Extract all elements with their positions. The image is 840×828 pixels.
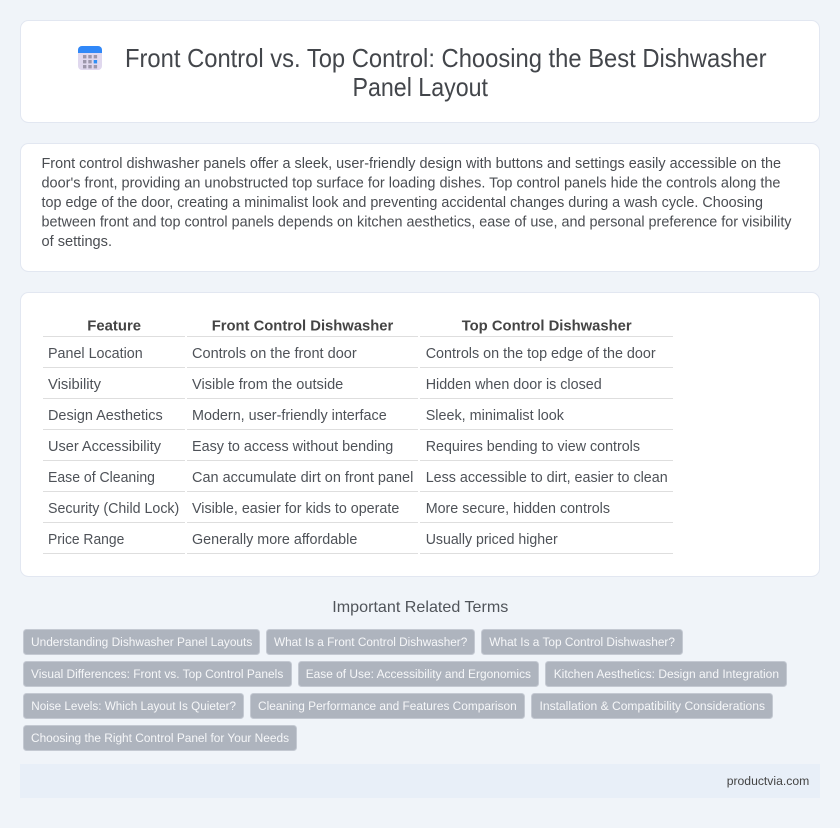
tag: Understanding Dishwasher Panel Layouts — [31, 635, 252, 649]
row: design aesthetics: Sleek, minimalist look — [426, 408, 565, 424]
row: user accessibility: Easy to access without bending — [192, 439, 393, 455]
row: panel location: Controls on the front door — [192, 346, 357, 362]
footer: productvia.com — [727, 774, 809, 788]
row: price range — [43, 532, 673, 554]
table header: Top Control Dishwasher — [462, 318, 632, 334]
row: design aesthetics: Design Aesthetics — [48, 408, 163, 424]
tag — [24, 662, 292, 686]
panel: description — [20, 144, 820, 272]
text block: description: of settings. — [42, 234, 112, 250]
tag: Noise Levels: Which Layout Is Quieter? — [31, 699, 236, 713]
row: ease of cleaning — [43, 470, 673, 492]
title: Panel Layout — [352, 72, 489, 102]
panel: header — [20, 20, 820, 122]
table header: Feature — [87, 318, 141, 334]
row: user accessibility: Requires bending to view controls — [426, 439, 640, 455]
panel: comparison table — [20, 292, 820, 576]
text block: description: top edge of the door, creating a minimalist look and preventing accidental changes during a wash cycle. Choosing — [42, 195, 763, 211]
row: user accessibility: User Accessibility — [48, 439, 162, 455]
table header: Front Control Dishwasher — [212, 318, 394, 334]
row: price range: Price Range — [48, 532, 124, 548]
row: visibility: Visibility — [48, 377, 102, 393]
tag — [532, 694, 772, 718]
row: panel location: Controls on the top edge of the door — [426, 346, 656, 362]
row: visibility: Visible from the outside — [192, 377, 343, 393]
footer — [20, 764, 820, 798]
title — [125, 43, 767, 102]
row: user accessibility — [43, 439, 673, 460]
tag — [250, 694, 524, 718]
text block: description — [42, 156, 792, 250]
icon: dishwasher control panel — [78, 46, 102, 70]
tag: Installation & Compatibility Considerations — [540, 699, 765, 713]
tag: Cleaning Performance and Features Comparison — [258, 699, 517, 713]
text block: description: between front and top control panels depends on kitchen aesthetics, ease of use, and personal preference for visibility — [42, 214, 792, 230]
row: security: Security (Child Lock) — [48, 501, 179, 517]
tag: Ease of Use: Accessibility and Ergonomics — [306, 667, 531, 681]
title: Front Control vs. Top Control: Choosing the Best Dishwasher — [125, 43, 767, 73]
row: price range: Usually priced higher — [426, 532, 558, 548]
tag — [24, 726, 296, 750]
tag: What Is a Top Control Dishwasher? — [489, 635, 675, 649]
tag — [546, 662, 786, 686]
text block: description: door's front, providing an unobstructed top surface for loading dishes. Top control panels hide the controls along the — [42, 176, 780, 192]
row: ease of cleaning: Less accessible to dirt, easier to clean — [426, 470, 668, 486]
row: security: Visible, easier for kids to operate — [192, 501, 399, 517]
table header — [43, 318, 673, 336]
row: ease of cleaning: Ease of Cleaning — [48, 470, 155, 486]
tag: What Is a Front Control Dishwasher? — [274, 635, 468, 649]
row: price range: Generally more affordable — [192, 532, 357, 548]
text block: description: Front control dishwasher panels offer a sleek, user-friendly design with buttons and settings easily accessible on the — [42, 156, 781, 172]
row: panel location — [43, 346, 673, 368]
tag group: related terms — [24, 630, 786, 750]
row: visibility: Hidden when door is closed — [426, 377, 602, 393]
row: security — [43, 501, 673, 522]
tag — [24, 630, 260, 654]
row: panel location: Panel Location — [48, 346, 143, 362]
tag — [266, 630, 474, 654]
tag — [24, 694, 244, 718]
row: security: More secure, hidden controls — [426, 501, 610, 517]
tag: Choosing the Right Control Panel for Your Needs — [31, 731, 289, 745]
tag: Kitchen Aesthetics: Design and Integration — [554, 667, 779, 681]
row: ease of cleaning: Can accumulate dirt on front panel — [192, 470, 413, 486]
row: design aesthetics — [43, 408, 673, 430]
heading: related terms: Important Related Terms — [332, 599, 508, 616]
tag — [298, 662, 538, 686]
tag: Visual Differences: Front vs. Top Control Panels — [31, 667, 283, 681]
row: design aesthetics: Modern, user-friendly interface — [192, 408, 387, 424]
tag — [482, 630, 682, 654]
row: visibility — [43, 377, 673, 398]
